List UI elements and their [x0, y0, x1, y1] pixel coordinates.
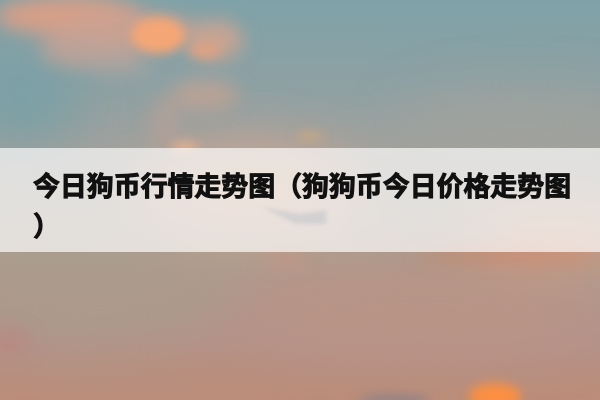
title: 今日狗币行情走势图（狗狗币今日价格走势图 — [33, 172, 571, 202]
title band — [0, 148, 600, 252]
title — [32, 172, 571, 242]
title: ） — [33, 212, 60, 242]
